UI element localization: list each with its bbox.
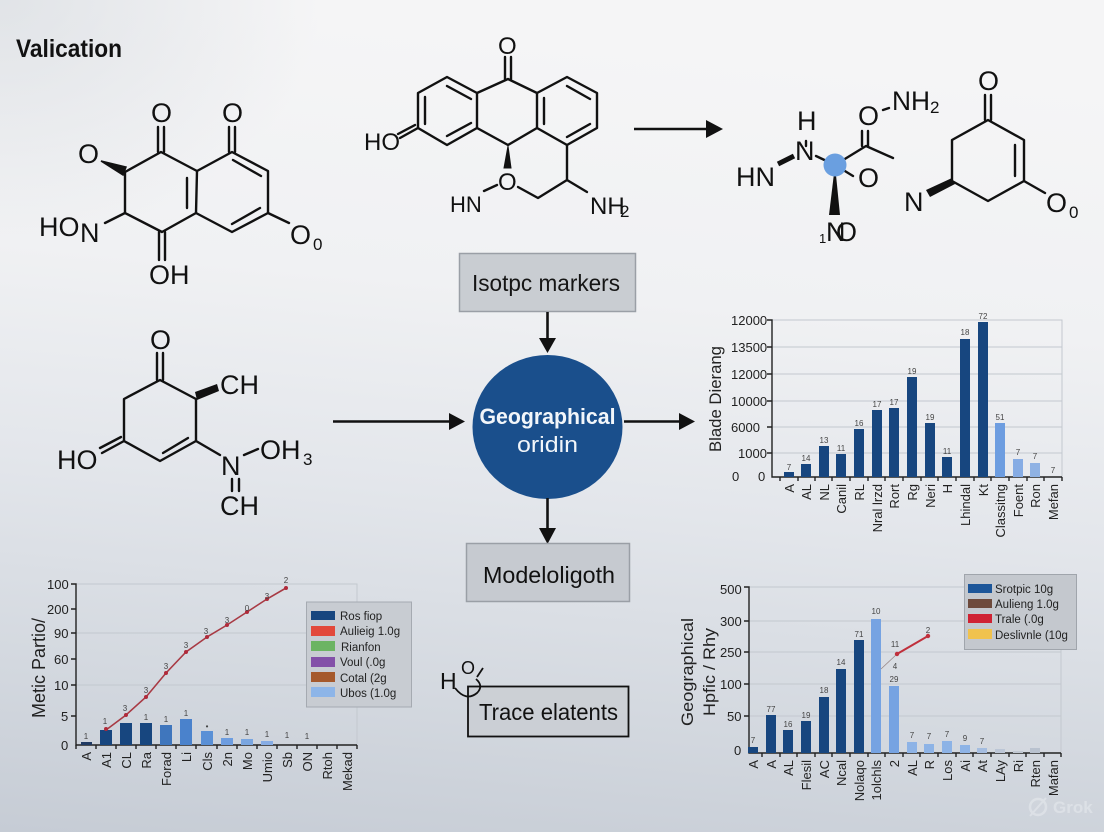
y axis labels: 60 (54, 652, 68, 667)
molecule: top right cyclohexenone: O (1046, 188, 1067, 218)
x axis labels: AL (799, 484, 814, 500)
molecule: top centre tricyclic: HO (364, 129, 400, 156)
value labels: 16 (784, 720, 793, 729)
y axis labels: 300 (720, 614, 742, 629)
molecule: middle left: 3 (303, 450, 312, 469)
x axis labels: AL (905, 760, 920, 776)
molecule: top left naphthoquinone: OH (149, 260, 190, 290)
legend: Srotpic 10g (995, 584, 1053, 596)
molecule: top right amino fragment: N (795, 136, 814, 166)
legend: Trale (.0g (995, 614, 1044, 626)
line series (104, 586, 288, 731)
value labels (751, 607, 985, 746)
molecule: top left naphthoquinone (39, 98, 322, 290)
value labels: 18 (820, 686, 829, 695)
value labels: 18 (961, 328, 970, 337)
molecule: top right amino fragment: HN (736, 162, 775, 192)
molecule: top left naphthoquinone: O (151, 98, 172, 128)
molecule: top right cyclohexenone: N (904, 187, 924, 217)
value labels: 77 (767, 705, 776, 714)
icon: H-O fragment on trace elements box (440, 658, 483, 697)
x axis labels (79, 751, 355, 791)
value labels: 7 (945, 730, 950, 739)
x axis labels: ON (300, 752, 315, 772)
value labels: 17 (890, 398, 899, 407)
x axis labels: Canil (834, 484, 849, 514)
value labels: 3 (225, 616, 230, 625)
value labels (787, 312, 1056, 475)
molecule: middle left: O (150, 325, 171, 355)
x axis labels: Ron (1028, 484, 1043, 508)
y axis labels: 90 (54, 626, 68, 641)
y axis labels: 5 (61, 709, 68, 724)
x axis labels: Umio (260, 752, 275, 782)
y axis labels: 10 (54, 678, 68, 693)
molecule: top right cyclohexenone: O (978, 66, 999, 96)
legend: Ros fiop (340, 611, 382, 623)
x axis labels: H (940, 484, 955, 493)
value labels: 1 (305, 732, 310, 741)
y axis labels: 50 (727, 709, 741, 724)
arrow: isotope markers to origin (539, 312, 556, 353)
value labels: 7 (1033, 452, 1038, 461)
x axis labels: LAy (993, 760, 1008, 782)
y axis title: Blade Dierang (706, 346, 725, 452)
x axis labels: 2 (887, 760, 902, 767)
label box: trace elements: Trace elatents (479, 699, 618, 725)
x axis labels: Mafan (1046, 760, 1061, 796)
value labels: 9 (963, 734, 968, 743)
molecule: top centre tricyclic: O (498, 33, 517, 60)
gridlines and frame (71, 584, 357, 749)
x axis labels: Neri (923, 484, 938, 508)
y axis labels: 0 (758, 469, 765, 484)
x axis labels: 1olchls (869, 760, 884, 800)
molecule: top centre tricyclic (364, 33, 629, 221)
molecule: top left naphthoquinone: O (222, 98, 243, 128)
combo chart: bottom left (29, 576, 412, 791)
value labels: 11 (943, 447, 952, 456)
y axis labels: 100 (47, 577, 69, 592)
value labels: 3 (123, 704, 128, 713)
circle: geographical origin: Geographical (480, 404, 616, 429)
y axis labels (720, 582, 742, 758)
y axis labels: 12000 (731, 367, 767, 382)
y axis labels: 250 (720, 645, 742, 660)
legend: Aulieig 1.0g (340, 626, 400, 638)
x axis labels: AC (817, 760, 832, 778)
y axis labels (47, 577, 69, 753)
label box: modelling (466, 544, 630, 602)
x axis labels: R (922, 760, 937, 769)
value labels: 7 (927, 732, 932, 741)
value labels: 1 (245, 728, 250, 737)
value labels: 29 (890, 675, 899, 684)
x axis labels: At (975, 760, 990, 772)
value labels: 1 (84, 732, 89, 741)
label box: trace elements (468, 686, 628, 736)
x axis labels: Ri (1011, 760, 1026, 772)
x axis labels (746, 760, 1061, 801)
value labels: 7 (751, 736, 756, 745)
value labels: 3 (164, 662, 169, 671)
value labels: 0 (245, 604, 250, 613)
molecule: middle left: N (221, 451, 240, 481)
legend (306, 602, 412, 707)
arrow: origin to modelling (539, 498, 556, 544)
y axis title: Geographical (678, 618, 697, 726)
value labels: 51 (996, 413, 1005, 422)
molecule: top right amino fragment: 1 (819, 231, 826, 246)
watermark: Grok (1053, 798, 1093, 817)
circle: geographical origin (472, 355, 622, 499)
x axis labels: NL (817, 484, 832, 501)
icon: H-O fragment on trace elements box: H (440, 668, 457, 694)
y axis labels: 0 (734, 743, 741, 758)
value labels: 3 (144, 686, 149, 695)
bars (784, 322, 1040, 477)
molecule: top centre tricyclic: O (498, 169, 517, 196)
value labels: 4 (893, 662, 898, 671)
molecule: middle left: HO (57, 445, 98, 475)
value labels: 14 (802, 454, 811, 463)
molecule: top right amino fragment (736, 86, 939, 247)
x axis labels (782, 484, 1061, 537)
value labels: 1 (265, 730, 270, 739)
x axis labels: Mekad (340, 752, 355, 791)
molecule: middle left: OH (260, 435, 300, 465)
x axis labels: Flesil (799, 760, 814, 790)
gridlines and frame (767, 320, 1062, 481)
watermark (1030, 798, 1093, 817)
molecule: top right amino fragment: NO (826, 217, 857, 247)
x axis labels: Nral lrzd (870, 484, 885, 532)
y axis title (678, 618, 719, 726)
x axis labels: Mo (240, 752, 255, 770)
molecule: top left naphthoquinone: 0 (313, 235, 322, 254)
x axis labels: Mefan (1046, 484, 1061, 520)
x axis labels: A1 (99, 752, 114, 768)
legend: Ubos (1.0g (340, 688, 396, 700)
molecule: top right amino fragment: H (797, 106, 816, 136)
value labels: • (206, 722, 209, 731)
x axis labels: Kt (976, 484, 991, 496)
x axis labels: Los (940, 760, 955, 781)
x axis labels: RL (852, 484, 867, 501)
y axis labels: 1000 (738, 446, 767, 461)
value labels: 3 (184, 641, 189, 650)
title: Valication (16, 35, 122, 63)
x axis labels: Nolaqo (852, 760, 867, 801)
x axis labels: Rtoh (320, 752, 335, 779)
y axis labels: 10000 (731, 394, 767, 409)
value labels: 11 (891, 640, 900, 649)
legend (964, 574, 1076, 650)
x axis labels: Sb (280, 752, 295, 768)
value labels: 19 (802, 711, 811, 720)
value labels: 11 (837, 444, 846, 453)
y axis labels: 100 (720, 677, 742, 692)
value labels: 16 (855, 419, 864, 428)
molecule: top right amino fragment: O (858, 101, 879, 131)
y axis labels: 200 (47, 602, 69, 617)
value labels: 1 (164, 715, 169, 724)
x axis labels: Lhindal (958, 484, 973, 526)
value labels (84, 576, 310, 741)
molecule: top centre tricyclic: HN (450, 192, 482, 217)
y axis labels: 6000 (731, 420, 760, 435)
x axis labels: Rten (1028, 760, 1043, 787)
y axis title: Metic Partio/ (29, 618, 49, 718)
value labels: 13 (820, 436, 829, 445)
value labels: 7 (787, 463, 792, 472)
label box: modelling: Modeloligoth (483, 562, 615, 588)
molecule: top left naphthoquinone: HO (39, 212, 80, 242)
molecule: top centre tricyclic: 2 (620, 202, 629, 221)
bar chart: bottom right (678, 574, 1076, 801)
y axis labels: 500 (720, 582, 742, 597)
value labels: 3 (204, 627, 209, 636)
y axis labels (731, 313, 767, 484)
value labels: 17 (873, 400, 882, 409)
value labels: 1 (144, 713, 149, 722)
value labels: 1 (184, 709, 189, 718)
x axis labels: Rort (887, 484, 902, 509)
legend: Rianfon (341, 642, 381, 654)
value labels: 14 (837, 658, 846, 667)
arrow: left molecule to origin (333, 413, 465, 430)
value labels: 1 (225, 728, 230, 737)
arrow: top molecule to product (634, 120, 723, 138)
value labels: 19 (908, 367, 917, 376)
value labels: 2 (284, 576, 289, 585)
y axis labels: 0 (61, 738, 68, 753)
y axis title: Hpfic / Rhy (700, 627, 719, 716)
value labels: 7 (910, 731, 915, 740)
y axis labels: 13500 (731, 340, 767, 355)
molecule: top centre tricyclic: NH (590, 193, 625, 220)
x axis labels: A (746, 760, 761, 769)
legend: Voul (.0g (340, 657, 385, 669)
x axis labels: A (782, 484, 797, 493)
value labels: 19 (926, 413, 935, 422)
x axis labels: 2n (220, 752, 235, 766)
value labels: 7 (1051, 466, 1056, 475)
molecule: top right amino fragment: 2 (930, 98, 939, 117)
bars (748, 619, 1040, 753)
molecule: top left naphthoquinone: N (80, 218, 100, 248)
value labels: 71 (855, 630, 864, 639)
bar chart: right (706, 312, 1062, 537)
x axis labels: Foent (1011, 484, 1026, 517)
molecule: middle left (57, 325, 312, 521)
value labels: 2 (926, 626, 931, 635)
x axis labels: Ra (139, 751, 154, 769)
value labels: 1 (103, 717, 108, 726)
molecule: top left naphthoquinone: O (290, 220, 311, 250)
legend: Deslivnle (10g (995, 630, 1068, 642)
x axis labels: AL (781, 760, 796, 776)
x axis labels: Li (179, 752, 194, 762)
molecule: top right amino fragment: NH (892, 86, 930, 116)
x axis labels: Forad (159, 752, 174, 786)
x axis labels: Classitng (993, 484, 1008, 537)
x axis labels: Ai (958, 760, 973, 772)
x axis labels: CL (119, 752, 134, 769)
value labels: 3 (265, 592, 270, 601)
molecule: top right cyclohexenone: 0 (1069, 203, 1078, 222)
value labels: 1 (285, 731, 290, 740)
value labels: 10 (872, 607, 881, 616)
label box: isotope markers (460, 254, 636, 312)
x axis labels: A (79, 752, 94, 761)
label box: isotope markers: Isotpc markers (472, 270, 620, 296)
y axis labels: 12000 (731, 313, 767, 328)
line series (881, 634, 930, 669)
icon: H-O fragment on trace elements box: O (461, 658, 475, 678)
molecule: middle left: CH (220, 491, 259, 521)
legend: Cotal (2g (340, 673, 387, 685)
x axis labels: Cls (200, 752, 215, 771)
bars (81, 719, 273, 745)
value labels: 72 (979, 312, 988, 321)
arrow: origin to bar chart (624, 413, 695, 430)
value labels: 7 (1016, 448, 1021, 457)
molecule: top right cyclohexenone (904, 66, 1078, 222)
circle: geographical origin: oridin (517, 432, 578, 457)
x axis labels: A (764, 760, 779, 769)
molecule: middle left: CH (220, 370, 259, 400)
legend: Aulieng 1.0g (995, 599, 1059, 611)
x axis labels: Rg (905, 484, 920, 501)
molecule: top right amino fragment: O (858, 163, 879, 193)
gridlines and frame (744, 587, 1061, 757)
x axis labels: Ncal (834, 760, 849, 786)
molecule: top left naphthoquinone: O (78, 139, 99, 169)
y axis labels: 0 (732, 469, 739, 484)
value labels: 7 (980, 737, 985, 746)
